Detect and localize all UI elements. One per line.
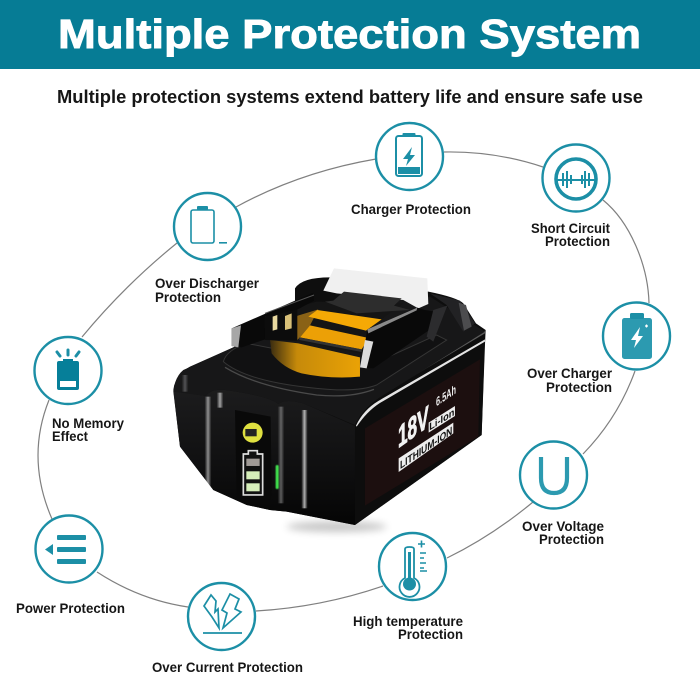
icon: arrow lines — [45, 535, 86, 564]
label: Over Current Protection — [152, 659, 303, 675]
item: no memory effect: Effect — [52, 428, 88, 444]
icon: charging battery — [396, 133, 422, 176]
yellow wall — [297, 309, 318, 341]
item: short circuit protection: Protection — [545, 233, 610, 249]
label: Power Protection — [16, 600, 125, 616]
inner cavity — [265, 302, 403, 355]
label: Charger Protection — [351, 201, 471, 217]
label panel — [365, 359, 480, 506]
item: power protection — [16, 516, 125, 616]
battery product image — [173, 268, 486, 532]
side highlight — [356, 339, 485, 427]
label: Short Circuit — [531, 220, 610, 236]
item: over voltage protection — [520, 442, 604, 547]
indicator recess — [235, 410, 272, 500]
icon: U — [541, 457, 567, 493]
item: charger protection — [351, 123, 471, 217]
shadow — [287, 521, 387, 532]
contacts — [265, 310, 297, 341]
item: short circuit protection — [531, 144, 610, 249]
side face — [355, 335, 485, 525]
item: over discharger protection — [155, 193, 260, 305]
yellow button — [243, 423, 263, 443]
item: high temperature protection — [353, 533, 463, 642]
icon: empty battery — [191, 206, 227, 244]
green led — [276, 465, 279, 489]
yellow terminal upper — [308, 310, 382, 331]
label Li-Ion — [429, 406, 455, 433]
header banner — [0, 0, 700, 69]
icon: battery with rays — [57, 350, 79, 390]
right rail — [360, 308, 435, 368]
yellow terminal lower — [300, 325, 369, 349]
battery product image: LITHIUM-ION — [400, 424, 452, 472]
icon: full battery — [622, 313, 652, 359]
front face — [173, 390, 355, 525]
item: high temperature protection: Protection — [398, 626, 463, 642]
label: Over Voltage — [522, 518, 604, 534]
body — [173, 277, 486, 525]
label: Over Charger — [527, 365, 613, 381]
label: No Memory — [52, 415, 124, 431]
white release clip — [323, 268, 428, 308]
item: over charger protection — [527, 302, 670, 395]
rear shoulder — [430, 293, 475, 332]
icon: circuit — [556, 159, 596, 199]
gloss highlights — [182, 375, 308, 508]
item: no memory effect — [34, 337, 124, 444]
label text 18V: 18V — [398, 399, 429, 455]
connecting ring — [38, 152, 649, 611]
label: High temperature — [353, 613, 463, 629]
left rail — [232, 293, 314, 347]
top plate — [173, 297, 485, 425]
yellow reflection — [270, 340, 360, 377]
icon: thermometer — [400, 540, 427, 597]
subtitle: Multiple protection systems extend battery life and ensure safe use — [57, 87, 643, 107]
item: over voltage protection: Protection — [539, 531, 604, 547]
item: over discharger protection: Protection — [155, 289, 221, 305]
title: Multiple Protection System — [58, 11, 641, 57]
item: over charger protection: Protection — [546, 379, 612, 395]
battery product image: Li-Ion — [429, 407, 454, 433]
charge gauge — [243, 451, 263, 495]
label: Over Discharger — [155, 275, 260, 291]
icon: lightning — [203, 594, 242, 633]
item: over current protection — [152, 583, 303, 675]
label capacity: 6.5Ah — [436, 381, 456, 409]
label Lithium-Ion — [399, 423, 453, 472]
